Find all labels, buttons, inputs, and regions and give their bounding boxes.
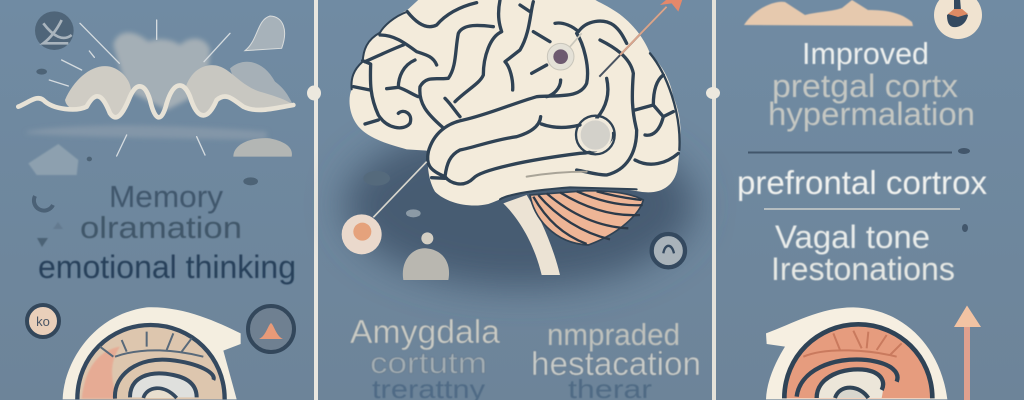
icon: brain cross-section left: [63, 307, 241, 399]
cortex folds: [803, 331, 902, 357]
brain body: [349, 0, 681, 206]
text: Irestonations: Irestonations: [771, 251, 955, 287]
arrow: top right pointer: [599, 0, 683, 77]
icon: dark circle: [35, 11, 74, 50]
text: Memory: Memory: [109, 179, 224, 214]
brain stem: [503, 195, 560, 275]
right cloud layers: [230, 62, 293, 107]
text: impraded: nmpraded: [547, 317, 680, 352]
cream halo: [63, 307, 241, 399]
icon: badge left: ko: [36, 314, 50, 329]
text: cortutm: cortutm: [370, 347, 487, 380]
arrow: upward: [954, 306, 981, 400]
pink cortex: [82, 347, 120, 399]
icon: badge left: [27, 305, 59, 337]
panel: left: [18, 11, 296, 399]
back clouds: [113, 33, 210, 110]
text: hypermalation: hypermalation: [768, 96, 975, 132]
inner brain fill: [77, 325, 225, 399]
haze band: [27, 125, 267, 140]
icon: small ring upper: [34, 196, 53, 211]
icon: small hearts: [37, 222, 63, 247]
small dark specks: [36, 69, 258, 185]
inner brain fill: [784, 324, 932, 398]
speck: [962, 224, 968, 232]
specks: [363, 171, 421, 217]
divider right: [706, 0, 720, 400]
marker: lower node: [576, 116, 615, 154]
cerebellum: [530, 191, 643, 245]
divider left: [307, 0, 321, 400]
text: emotional thinking: emotional thinking: [38, 249, 296, 285]
text: dramation: olramation: [80, 210, 242, 245]
text: Amygdala: Amygdala: [350, 313, 501, 350]
marker: upper node: [547, 33, 582, 70]
inner folds: [797, 359, 897, 397]
icon: pale bubble: [245, 16, 285, 51]
pointer line and amygdala node: [342, 162, 427, 254]
dot on rule: [958, 148, 970, 154]
icon: badge right: [248, 306, 294, 352]
cream halo: [766, 307, 947, 399]
lower left house: [28, 144, 78, 175]
icon: brain cross-section right: [766, 307, 947, 399]
sulci: [351, 0, 680, 199]
text: prefgal cortx: pretgal cortx: [772, 68, 958, 104]
icon: bell shape: [403, 232, 449, 280]
rule lower: [764, 208, 960, 210]
folds: [100, 332, 203, 357]
text: prefrontal cortrox: prefrontal cortrox: [737, 164, 987, 201]
illustration: top right clouds: [744, 0, 913, 26]
illustration: main brain: [342, 0, 685, 280]
panel: center: [342, 0, 701, 400]
icon: small ring right: [652, 234, 685, 267]
text: Vagal tone: Vagal tone: [775, 219, 930, 255]
inner brain ring: [784, 324, 932, 398]
illustration: emotional wave: [18, 11, 293, 185]
text: Improved: Improved: [802, 36, 929, 71]
brain shadow: [345, 123, 695, 287]
panel: right: [737, 0, 987, 400]
rule upper: [748, 152, 952, 154]
text: hestacation: hestacation: [531, 345, 701, 382]
right hill: [185, 65, 293, 115]
icon: top right badge: [934, 0, 982, 39]
left hill: [65, 66, 131, 117]
inner brain ring: [77, 325, 225, 399]
lower right cloud: [233, 138, 292, 157]
radiating rays: [49, 20, 230, 156]
wave line: [18, 85, 293, 117]
